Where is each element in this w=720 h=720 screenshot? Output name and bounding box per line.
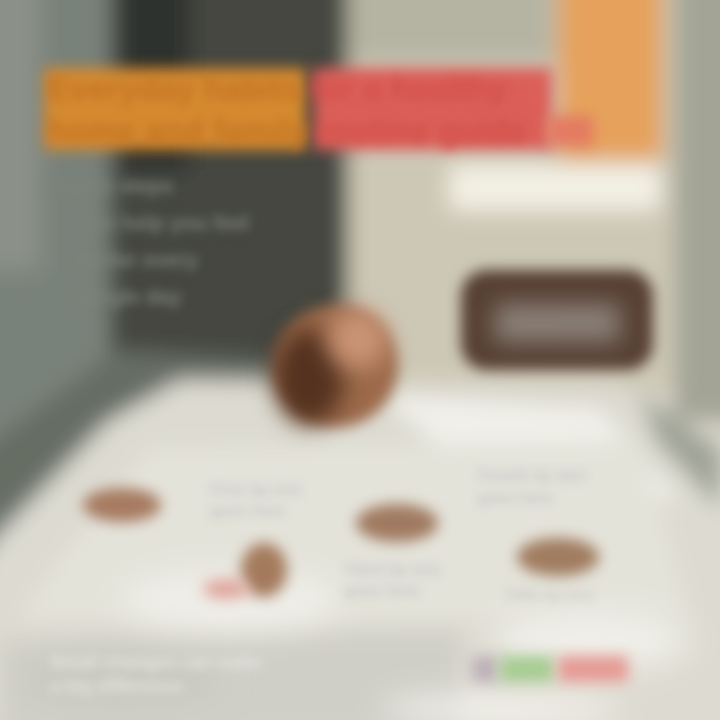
item 3 text [344,562,441,600]
icon: dark left side [274,329,344,425]
sign: panel [461,270,653,370]
logo: grey segment [472,656,498,682]
item 4 text [478,468,586,507]
central round icon [256,296,408,442]
item 5 icon [517,538,599,576]
item 1 [75,478,302,532]
intro text block: single day [79,286,182,309]
heading text [46,70,527,154]
footer text: Small changes can make [50,652,263,672]
heading: red panel [314,68,552,150]
item 5 [507,528,608,604]
item 2 accent [203,579,249,599]
heading: orange panel [44,68,306,150]
item 3 icon [356,504,438,542]
floor mottling [20,570,690,720]
item 5 text: Fifth tip text [507,587,593,604]
intro text block [44,175,251,309]
heading text: Everyday habits for a healthy [48,70,507,107]
intro text block: can help you feel [79,212,249,235]
intro text block: better every [79,249,198,272]
footer text [50,652,263,696]
heading band [36,58,599,160]
icon: highlight [328,309,388,369]
footer logo strip [466,647,636,690]
item 1 text: goes here [210,503,286,520]
heading: red tail [547,116,593,146]
item 4 text: Fourth tip text [478,468,586,485]
item 3 [344,494,446,600]
logo: red segment [558,656,628,682]
item 3 text: Third tip text [344,562,441,579]
sign: text: for today [495,324,557,341]
item 1 text [210,482,302,520]
item 3 text: goes here [344,583,420,600]
item 2 icon [241,543,287,597]
icon: outer circle [274,305,398,427]
heading text: home and family routine guide [48,112,527,149]
item 1 text: First tip text [210,482,302,499]
footer text: a big difference [50,676,183,696]
item 4 text: goes here [478,490,554,507]
sign: text: Useful tip [495,305,562,322]
item 2 [198,534,297,607]
logo: green segment [500,656,554,682]
sign: text [495,304,620,342]
dark brown sign [450,260,664,381]
item 1 icon [83,488,161,522]
intro text block: Simple steps [44,175,174,198]
